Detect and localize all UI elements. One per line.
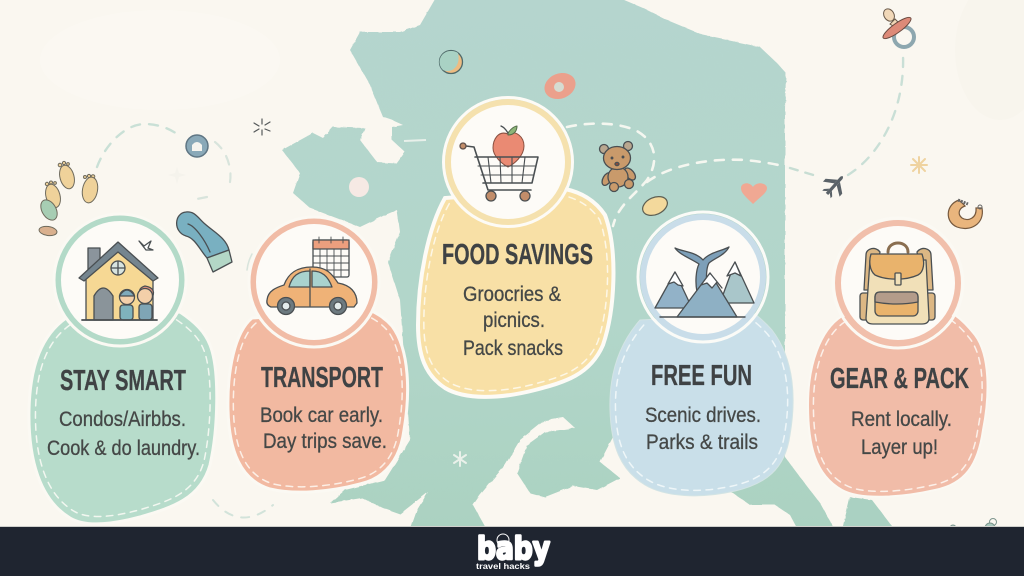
logo: baby travel hacks: baby (477, 531, 550, 567)
icon circle: car and calendar (249, 217, 379, 347)
icon: airplane (818, 169, 851, 202)
text: gear and pack line 1: Rent locally. (851, 408, 952, 431)
panel: food savings (418, 189, 613, 397)
icon: ball (440, 50, 462, 74)
text: food savings line 2: picnics. (483, 309, 545, 332)
panel: free fun (610, 314, 793, 496)
icon: blue sock (177, 212, 232, 272)
icon: footprints (37, 161, 100, 237)
heading: free fun: FREE FUN (651, 360, 752, 392)
icon: sun sparkle (911, 157, 927, 173)
text: transport line 1: Book car early. (260, 404, 383, 427)
text: stay smart line 1: Condos/Airbbs. (59, 408, 186, 431)
text: gear and pack line 2: Layer up! (861, 436, 938, 459)
heading: food savings: FOOD SAVINGS (442, 239, 593, 271)
panel: gear and pack (808, 315, 988, 497)
logo: baby travel hacks: travel hacks (476, 561, 530, 571)
heading: stay smart: STAY SMART (60, 365, 186, 397)
icon circle: house (54, 214, 186, 346)
icon: bottom right toys (950, 518, 996, 533)
text: food savings line 3: Pack snacks (463, 337, 563, 360)
footer bar (0, 526, 1024, 576)
icon: pale star (168, 167, 186, 184)
icon: teal ring (186, 135, 208, 157)
icon: pacifier (881, 7, 914, 47)
map of Alaska (282, 0, 895, 530)
icon: coin (640, 193, 670, 219)
text: food savings line 1: Groocries & (463, 283, 561, 306)
panel: stay smart (29, 312, 217, 524)
heading: transport: TRANSPORT (261, 362, 383, 394)
panel: transport (228, 310, 408, 492)
icon: teddy bear (600, 142, 638, 192)
snowflake (454, 452, 466, 466)
icon: rattle (948, 200, 982, 228)
icon circle: shopping cart with apple (444, 98, 572, 226)
icon: asterisk star (254, 119, 270, 135)
icon: donut teether (540, 68, 580, 104)
text: free fun line 2: Parks & trails (646, 431, 758, 454)
icon: heart (741, 183, 767, 204)
icon circle: backpack (833, 218, 963, 348)
text: stay smart line 2: Cook & do laundry. (47, 437, 200, 460)
icon circle: whale tail and mountains (638, 212, 768, 342)
dashed travel paths (97, 55, 903, 518)
text: free fun line 1: Scenic drives. (645, 404, 761, 427)
text: transport line 2: Day trips save. (263, 430, 387, 453)
